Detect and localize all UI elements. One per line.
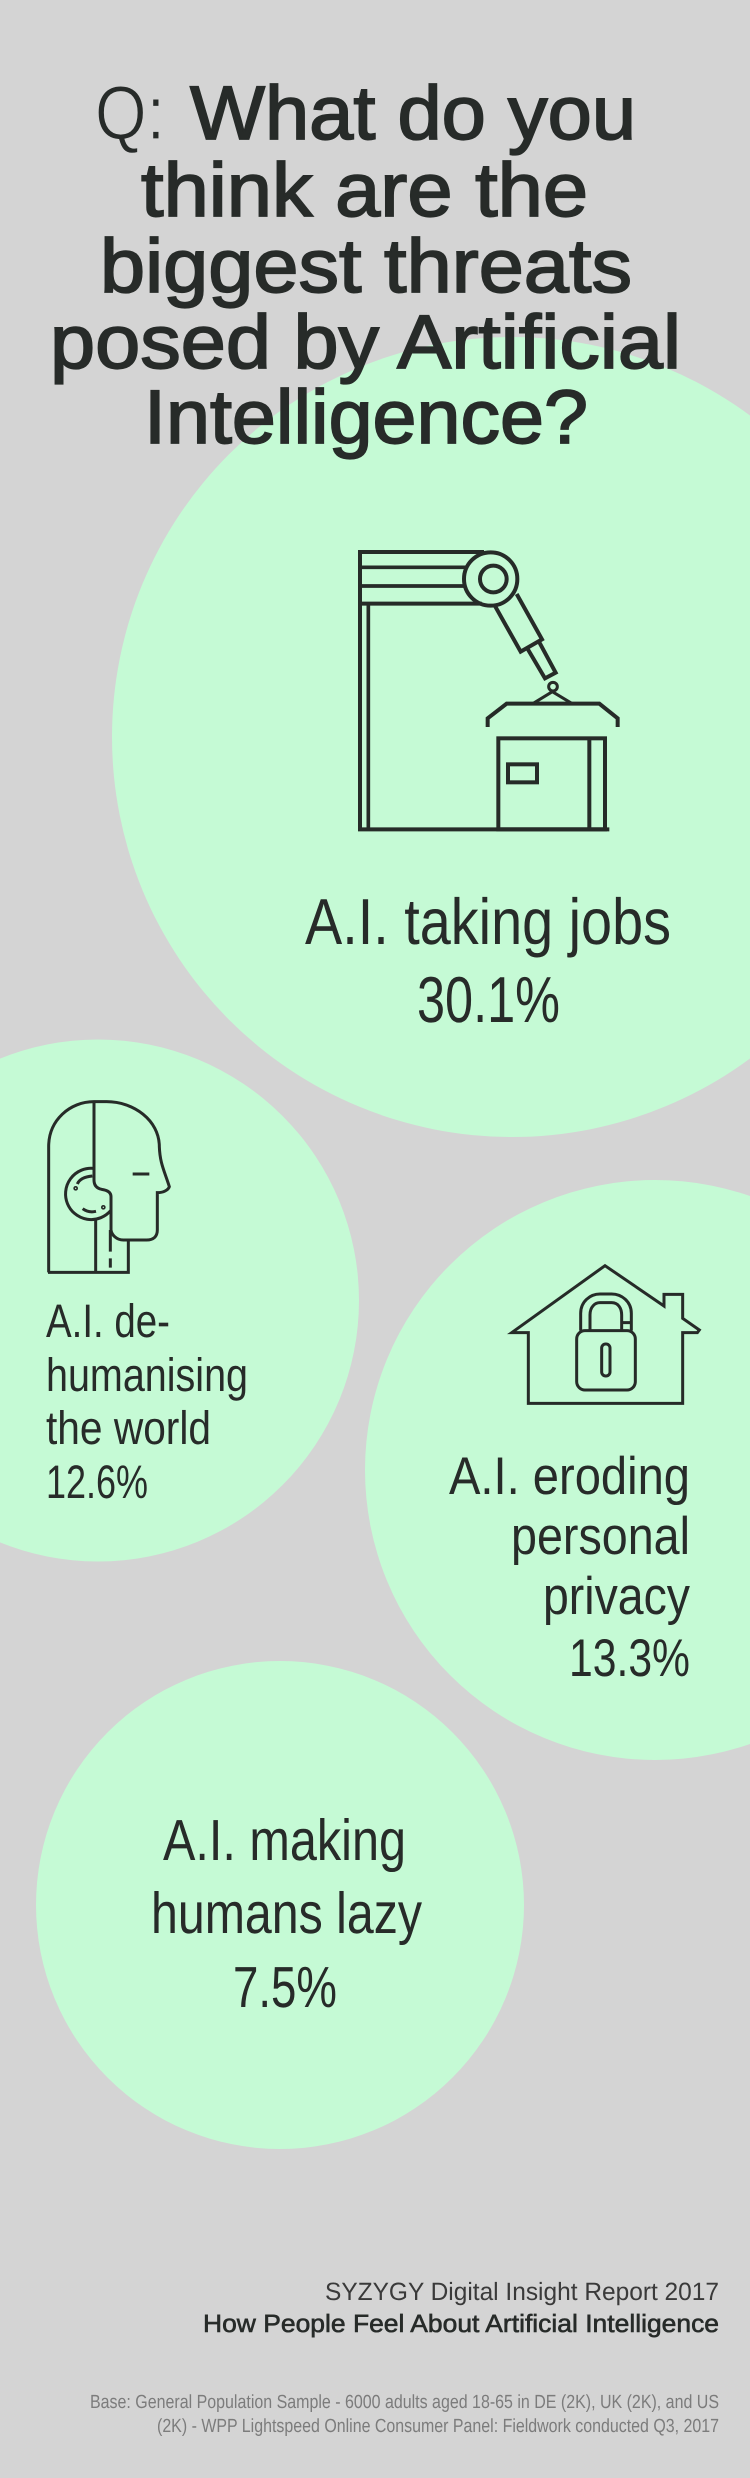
label: A.I. making humans lazy (151, 1808, 422, 2020)
panel: A.I. de-humanising the world (0, 1040, 359, 1562)
title: Q: (95, 71, 165, 156)
panel: A.I. eroding personal privacy (365, 1180, 750, 1760)
label: A.I. de-humanising the world: A.I. de- (46, 1294, 170, 1347)
bubble: taking jobs (112, 337, 750, 1137)
footnote: base and fieldwork (90, 2392, 719, 2437)
bubble: eroding privacy (365, 1180, 750, 1760)
title: Intelligence? (144, 375, 588, 460)
label: A.I. making humans lazy: humans lazy (151, 1881, 422, 1946)
label: A.I. de-humanising the world: humanising (46, 1348, 248, 1401)
label: A.I. taking jobs: A.I. taking jobs (305, 885, 671, 958)
label: A.I. eroding personal privacy (449, 1447, 690, 1688)
panel: A.I. taking jobs (112, 337, 750, 1137)
bubble: de-humanising (0, 1040, 359, 1562)
source: report name: How People Feel About Artificial Intelligence (203, 2310, 719, 2338)
title: posed by Artificial (50, 300, 681, 385)
label: A.I. eroding personal privacy: A.I. eroding (449, 1447, 690, 1506)
title (50, 71, 681, 460)
title: What do you (190, 71, 636, 156)
label: A.I. de-humanising the world (46, 1294, 248, 1508)
panel: A.I. making humans lazy (36, 1661, 524, 2149)
label: A.I. eroding personal privacy: personal (511, 1507, 690, 1566)
label: A.I. eroding personal privacy: 13.3% (569, 1629, 690, 1688)
value: 30.1%: 30.1% (417, 963, 560, 1036)
title: biggest threats (100, 224, 632, 309)
label: A.I. de-humanising the world: 12.6% (46, 1455, 148, 1508)
label: A.I. eroding personal privacy: privacy (543, 1567, 690, 1626)
icon: human and robot head (48, 1102, 169, 1272)
label: A.I. making humans lazy: A.I. making (163, 1808, 406, 1873)
source: report name (203, 2278, 719, 2338)
label: A.I. making humans lazy: 7.5% (233, 1955, 337, 2020)
icon: house with padlock (512, 1266, 699, 1403)
title: think are the (141, 148, 588, 233)
icon: robot arm lifting a box (358, 552, 618, 831)
label: A.I. de-humanising the world: the world (46, 1401, 211, 1454)
source: report name: SYZYGY Digital Insight Report 2017 (325, 2278, 719, 2306)
bubble: making humans lazy (36, 1661, 524, 2149)
